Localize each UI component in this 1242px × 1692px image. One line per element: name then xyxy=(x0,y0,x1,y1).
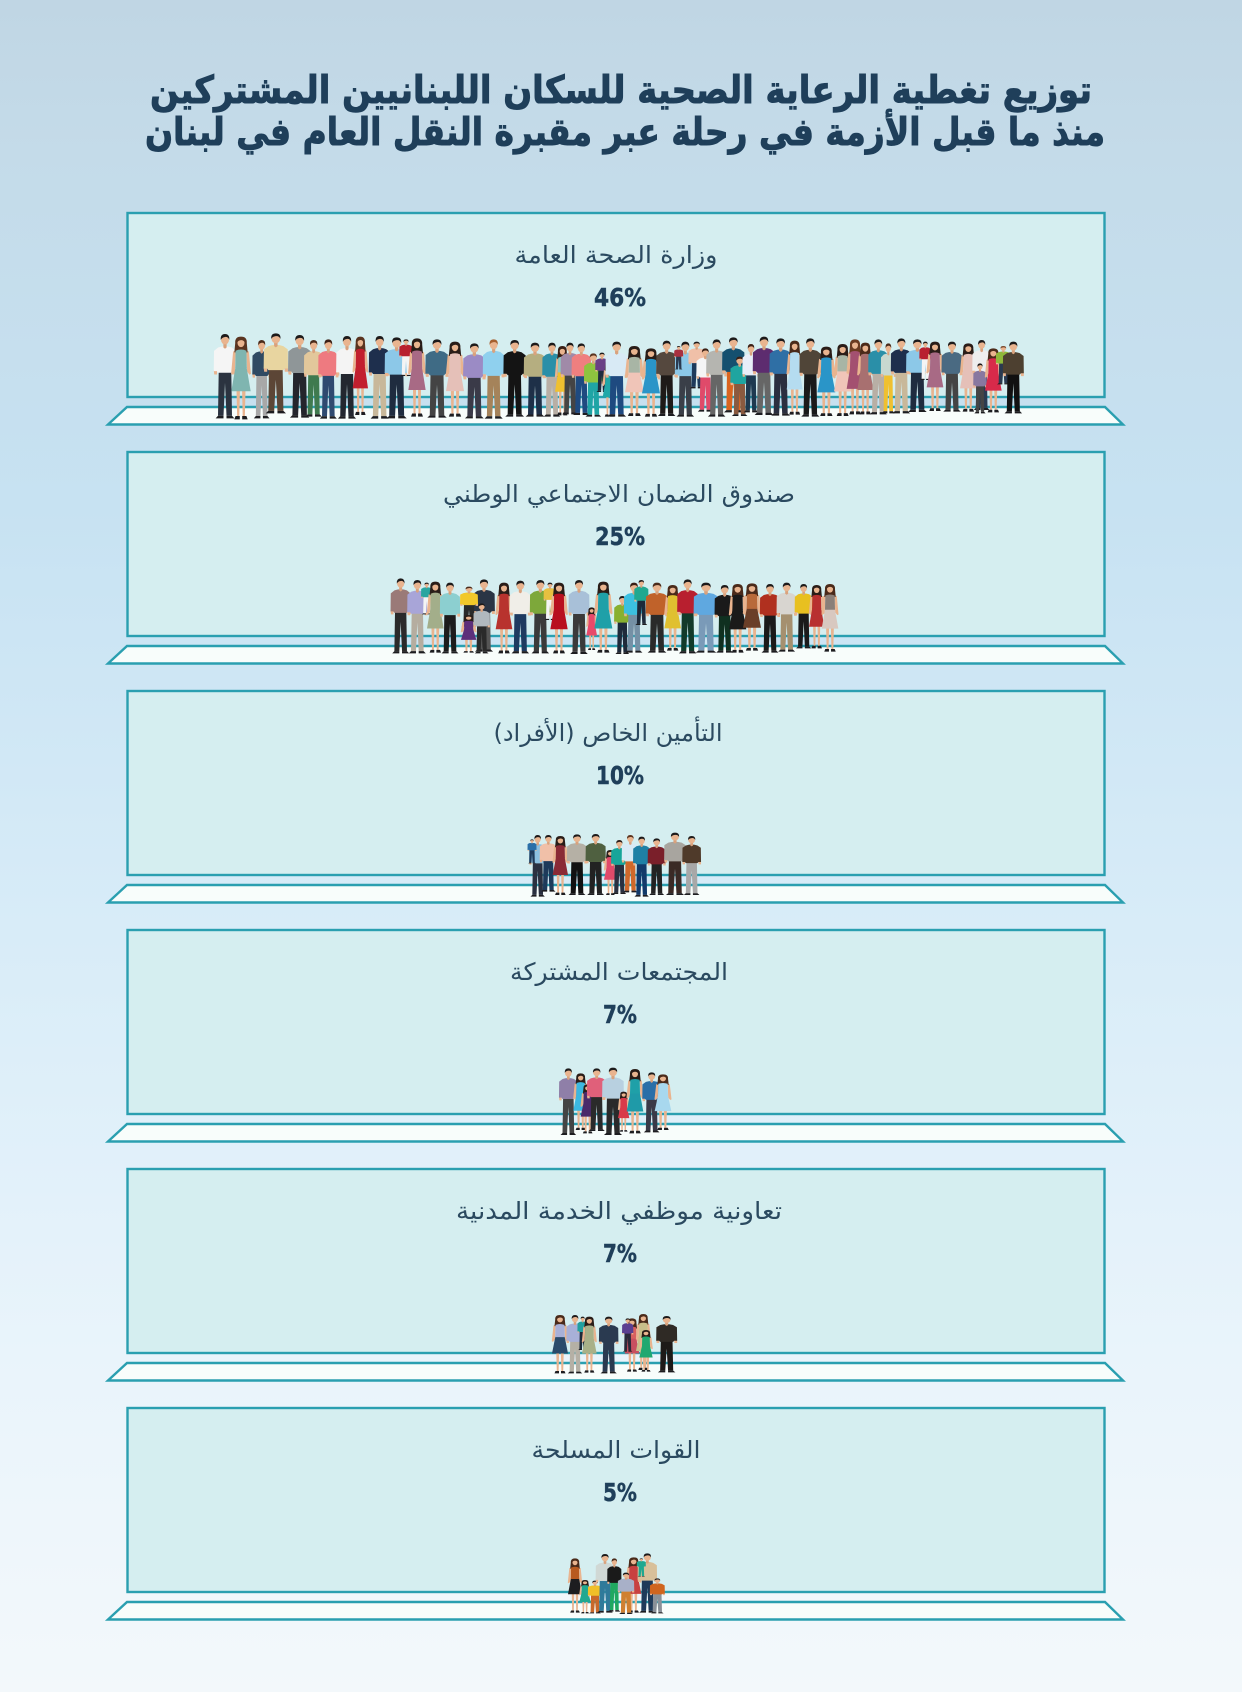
platform xyxy=(108,885,1123,902)
panel percentage: 46% xyxy=(594,283,646,312)
panel box xyxy=(128,691,1104,875)
title xyxy=(145,68,1105,155)
crowd: 10 percent xyxy=(527,833,701,897)
panel box xyxy=(128,1169,1104,1353)
panel label: التأمين الخاص (الأفراد) xyxy=(494,716,722,747)
crowd: 5 percent xyxy=(568,1553,665,1614)
platform xyxy=(108,1124,1123,1142)
panel box xyxy=(128,930,1104,1114)
panel label: تعاونية موظفي الخدمة المدنية xyxy=(456,1197,782,1225)
panel: national social security fund 25% xyxy=(108,452,1123,664)
panel: civil servants cooperative 7% xyxy=(108,1169,1123,1380)
platform xyxy=(108,407,1123,424)
panel: private insurance 10% xyxy=(108,691,1123,902)
panel box xyxy=(128,452,1104,636)
title: منذ ما قبل الأزمة في رحلة عبر مقبرة النقل العام في لبنان xyxy=(145,108,1105,155)
panel label: القوات المسلحة xyxy=(532,1436,700,1464)
panel percentage: 5% xyxy=(603,1478,637,1507)
panel percentage: 25% xyxy=(595,522,645,551)
platform xyxy=(108,1602,1123,1620)
panel percentage: 7% xyxy=(603,1239,637,1268)
panel label: المجتمعات المشتركة xyxy=(510,958,728,986)
crowd: 25 percent xyxy=(391,578,839,654)
panel label: وزارة الصحة العامة xyxy=(514,241,718,269)
crowd: 46 percent xyxy=(214,333,1024,419)
panel box xyxy=(128,213,1104,397)
panel label: صندوق الضمان الاجتماعي الوطني xyxy=(443,480,795,508)
crowd: 7 percent mutual funds xyxy=(559,1068,672,1135)
crowd: 7 percent cooperative xyxy=(552,1314,677,1373)
panel percentage: 7% xyxy=(603,1000,637,1029)
panel box xyxy=(128,1408,1104,1592)
panel percentage: 10% xyxy=(596,761,644,790)
platform xyxy=(108,646,1123,664)
panel: ministry of public health 46% xyxy=(108,213,1123,424)
panel: mutual funds 7% xyxy=(108,930,1123,1142)
title: توزيع تغطية الرعاية الصحية للسكان اللبنانيين المشتركين xyxy=(150,68,1092,112)
panel: armed forces 5% xyxy=(108,1408,1123,1620)
platform xyxy=(108,1363,1123,1380)
